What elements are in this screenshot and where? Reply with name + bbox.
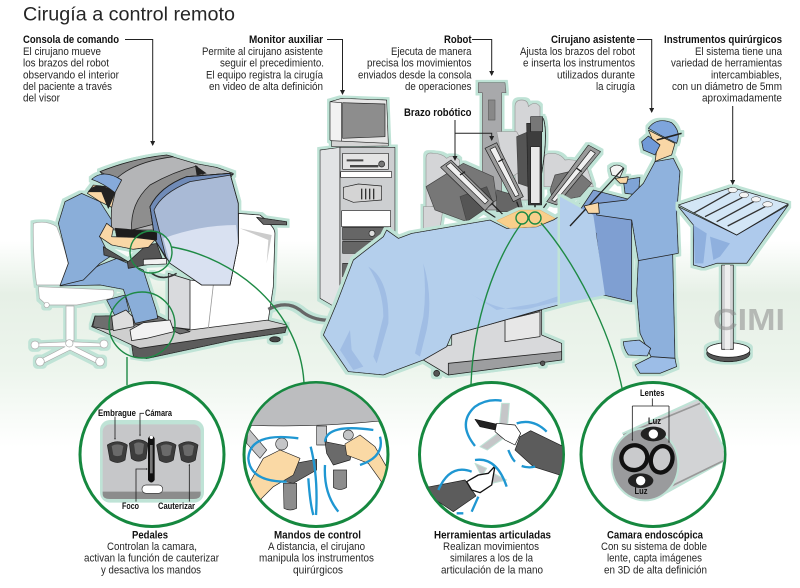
text block: mandos de control: A distancia, el cirujano <box>268 541 365 553</box>
icon: back shoe <box>112 310 134 331</box>
text block: herramientas articuladas: articulación de la mano <box>441 564 543 576</box>
icon: rotation arrows <box>438 400 547 513</box>
panel: mandos de control <box>240 380 390 526</box>
camera labels: Lentes <box>640 388 664 398</box>
icon: monitor <box>330 98 388 147</box>
text block: camara endoscopica: en 3D de alta definición <box>604 564 707 576</box>
text block: consola de comando <box>23 34 119 105</box>
icon: upper tool fingers <box>480 403 509 450</box>
icon: robot dark joints <box>426 132 592 222</box>
text block: consola de comando: del visor <box>23 93 60 105</box>
icon: table base <box>423 310 562 376</box>
text block: robot: Ejecuta de manera <box>391 46 472 58</box>
icon: pedal highlights <box>112 442 194 456</box>
icon: lenses <box>619 442 675 475</box>
text block: consola de comando: los brazos del robot <box>23 58 109 70</box>
text block: cirujano asistente: la cirugía <box>596 81 636 93</box>
text block: mandos de control <box>259 530 374 576</box>
icon: surgeon head <box>87 174 122 208</box>
text block: herramientas articuladas: Realizan movimientos <box>443 541 539 553</box>
icon: grey posts <box>247 426 353 510</box>
icon: upper tool shaft <box>515 431 565 477</box>
icon: robot arm one <box>441 160 503 218</box>
icon: surgeon body <box>58 193 158 323</box>
leader lines <box>125 40 733 184</box>
text block: herramientas articuladas: Herramientas articuladas <box>434 530 551 542</box>
text block: robot: de operaciones <box>405 81 472 93</box>
icon: robot arm two <box>485 143 523 215</box>
text block: camara endoscopica <box>601 530 707 576</box>
icon: hand controls <box>103 228 177 277</box>
connector lines and zoom markers <box>109 212 622 388</box>
text block: cirujano asistente: e inserta los instrumentos <box>523 58 635 70</box>
text block: cirujano asistente: utilizados durante <box>557 69 635 81</box>
icon: instruments <box>693 187 773 226</box>
pedal labels: Cámara <box>145 408 173 418</box>
icon: robot tower <box>478 83 506 210</box>
text block: robot: precisa los movimientos <box>367 58 472 70</box>
icon: console body <box>168 213 287 330</box>
text block: cirujano asistente: Ajusta los brazos del robot <box>520 46 635 58</box>
text block: consola de comando: Consola de comando <box>23 34 119 46</box>
text block: pedales: activan la función de cauterizar <box>84 553 219 565</box>
icon: pedals <box>107 440 198 462</box>
text block: monitor auxiliar: seguir el precedimiento. <box>220 58 324 70</box>
icon: shoe covers <box>623 340 677 373</box>
icon: rack <box>320 147 395 310</box>
text block: mandos de control: manipula los instrumentos <box>259 553 374 565</box>
text block: pedales <box>84 530 219 576</box>
pedal labels <box>98 408 195 511</box>
icon: hands <box>247 435 388 503</box>
icon: drape front fold <box>560 197 605 304</box>
panel: pedales <box>80 382 224 526</box>
pedal leaders <box>115 413 189 502</box>
icon: console visor <box>150 173 238 285</box>
icon: white pill <box>142 485 163 493</box>
text block: monitor auxiliar: en video de alta definición <box>209 81 323 93</box>
icon: drape right section <box>580 190 632 302</box>
text block: camara endoscopica: lente, capta imágenes <box>607 553 702 565</box>
icon: console underside <box>251 384 379 426</box>
text block: pedales: Pedales <box>132 530 168 542</box>
illustration: assistant surgeon <box>560 121 682 373</box>
text block: consola de comando: El cirujano mueve <box>23 46 101 58</box>
text block: monitor auxiliar: Monitor auxiliar <box>249 34 324 46</box>
icon: robot arm four <box>538 145 601 215</box>
icon: lower tool fingers <box>475 463 507 483</box>
icon: chair <box>31 222 114 366</box>
text block: monitor auxiliar: El equipo registra la cirugía <box>206 69 324 81</box>
text block: herramientas articuladas <box>434 530 551 576</box>
text block: robot: enviados desde la consola <box>358 69 472 81</box>
text block: instrumentos quirúrgicos: Instrumentos quirúrgicos <box>664 34 782 46</box>
icon: table drape <box>678 187 788 268</box>
text block: mandos de control: Mandos de control <box>274 530 361 542</box>
label: brazo robótico: Brazo robótico <box>404 107 472 119</box>
pedal labels: Foco <box>122 501 139 511</box>
icon: lower tool shaft <box>427 480 476 512</box>
icon: robot arm three <box>527 117 545 216</box>
text block: cirujano asistente: Cirujano asistente <box>551 34 635 46</box>
icon: far sleeve and glove <box>610 165 640 195</box>
text block: robot <box>358 34 472 93</box>
icon: pedal plate <box>100 420 204 503</box>
text block: instrumentos quirúrgicos: variedad de herramientas <box>671 58 782 70</box>
icon: robot rear arms <box>423 100 593 228</box>
icon: surgeon arm <box>99 223 155 249</box>
text block: camara endoscopica: Con su sistema de doble <box>601 541 707 553</box>
illustration: auxiliary monitor and rack <box>320 98 395 310</box>
text block: instrumentos quirúrgicos <box>664 34 783 105</box>
icon: second leg <box>107 295 129 316</box>
text block: camara endoscopica: Camara endoscópica <box>607 530 704 542</box>
illustration: operating table and drape <box>323 200 607 376</box>
icon: focus lever <box>148 435 155 482</box>
icon: drape <box>323 200 607 375</box>
text block: pedales: Controlan la camara, <box>107 541 197 553</box>
text block: herramientas articuladas: similares a los de la <box>450 553 534 565</box>
text block: pedales: y desactiva los mandos <box>101 564 201 576</box>
icon: motion arrows <box>248 428 381 515</box>
text block: robot: Robot <box>444 34 472 46</box>
icon: console base <box>92 315 287 359</box>
camera labels: Luz <box>634 486 648 496</box>
text block: cirujano asistente <box>520 34 636 93</box>
text block: instrumentos quirúrgicos: con un diámetro de 5mm <box>672 81 782 93</box>
icon: control grips <box>285 442 353 483</box>
illustration: instrument table <box>678 187 788 362</box>
text block: monitor auxiliar: Permite al cirujano asistente <box>202 46 323 58</box>
title: Cirugía a control remoto <box>23 4 235 26</box>
camera labels <box>634 388 664 496</box>
icon: upper tool jaws <box>475 419 521 445</box>
icon: camera tip <box>612 428 678 500</box>
icon: cable <box>268 305 333 320</box>
icon: gown <box>597 158 680 261</box>
camera labels: Luz <box>648 416 661 426</box>
icon: head <box>642 121 682 162</box>
panel: herramientas articuladas <box>420 382 565 526</box>
icon: camera shaft <box>623 398 728 493</box>
icon: lower tool jaws <box>467 466 495 493</box>
text block: mandos de control: quirúrgicos <box>293 564 343 576</box>
icon: front shoe <box>130 320 174 341</box>
icon: hood <box>100 155 233 230</box>
text block: instrumentos quirúrgicos: El sistema tiene una <box>695 46 783 58</box>
icon: pants <box>637 252 675 358</box>
text block: consola de comando: observando el interior <box>23 69 119 81</box>
panel: camara endoscopica <box>581 382 728 526</box>
icon: incision <box>497 210 555 228</box>
illustration: command console and surgeon <box>31 155 333 366</box>
icon: table stand <box>707 265 750 362</box>
icon: lights <box>628 427 666 488</box>
illustration: robot <box>423 83 601 228</box>
text block: monitor auxiliar <box>202 34 324 93</box>
pedal labels: Embrague <box>98 408 136 418</box>
text block: instrumentos quirúrgicos: intercambiables, <box>711 69 782 81</box>
watermark: CIMI: CIMI <box>713 302 785 337</box>
text block: consola de comando: del paciente a través <box>23 81 112 93</box>
pedal labels: Cauterizar <box>158 501 195 511</box>
camera leaders <box>632 398 669 443</box>
text block: instrumentos quirúrgicos: aproximadamente <box>702 93 782 105</box>
icon: hand and tool <box>570 168 623 226</box>
